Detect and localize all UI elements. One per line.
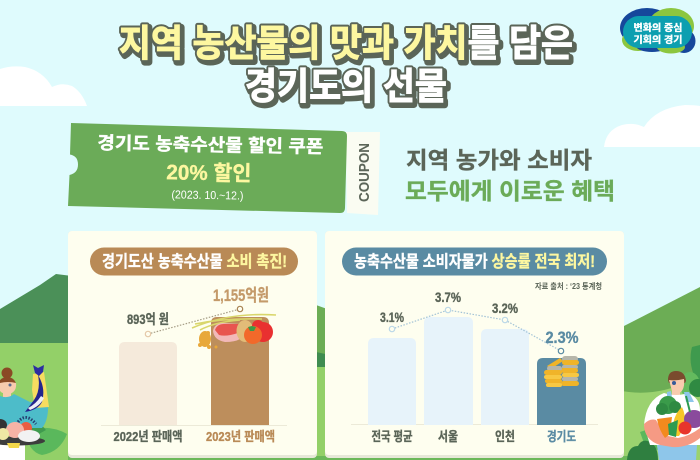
cloud right [604, 105, 700, 147]
panel: prices [325, 231, 624, 458]
bar average [368, 338, 416, 425]
prices heading pill: 농축수산물 소비자물가 상승률 전국 최저! [354, 252, 595, 271]
icon: farm produce [192, 315, 276, 349]
title: 지역 농산물의 맛과 가치를 담은 [119, 23, 573, 64]
coupon heading: 경기도 농축수산물 할인 쿠폰 [97, 133, 324, 157]
label 2022: 2022년 판매액 [114, 429, 182, 444]
source note: 자료 출처 : ‘23 통계청 [535, 281, 602, 291]
title [119, 23, 575, 110]
benefit text [405, 147, 615, 204]
sales bar chart [101, 286, 287, 444]
icon: woman with fish [0, 365, 67, 460]
value 2022: 893억 원 [127, 312, 169, 327]
icon: coins [544, 356, 579, 387]
cloud left [0, 66, 87, 106]
hills [0, 274, 700, 460]
label incheon: 인천 [495, 429, 515, 444]
trend line [392, 310, 561, 351]
title: 지역 농산물의 맛과 가치를 담은 [119, 23, 573, 64]
benefit text: 모두에게 이로운 혜택 [405, 178, 615, 204]
bar gyeonggi [537, 358, 586, 425]
panel: sales [68, 231, 317, 458]
sales heading pill [90, 248, 298, 276]
value 2023: 1,155억원 [213, 286, 269, 305]
price bar chart [351, 290, 598, 444]
coupon ticket [68, 123, 347, 213]
trend line [148, 309, 240, 334]
logo [620, 8, 696, 54]
value gyeonggi: 2.3% [546, 329, 579, 347]
icon: man with vegetables [627, 345, 700, 460]
prices heading pill [342, 248, 607, 276]
baseline [351, 424, 598, 425]
title: 경기도의 선물 [245, 66, 447, 107]
title: 경기도의 선물 [247, 68, 449, 110]
bar seoul [424, 317, 473, 425]
baseline [101, 425, 287, 426]
bar incheon [481, 329, 529, 425]
label average: 전국 평균 [372, 429, 413, 444]
bar 2023 [211, 317, 269, 425]
benefit text: 지역 농가와 소비자 [406, 147, 592, 173]
coupon dates: (2023. 10.~12.) [171, 189, 244, 203]
label gyeonggi: 경기도 [547, 429, 576, 444]
sales heading pill: 경기도산 농축수산물 소비 촉진! [102, 252, 287, 271]
coupon stub: COUPON [357, 143, 373, 202]
coupon stub [346, 132, 380, 215]
logo: 변화의 중심 [634, 22, 682, 34]
coupon [68, 123, 380, 215]
icon: seafood platter [0, 417, 45, 460]
title: 지역 농산물의 맛과 가치를 담은 [121, 26, 575, 66]
value average: 3.1% [380, 310, 404, 325]
value incheon: 3.2% [492, 301, 518, 316]
logo: 기회의 경기 [634, 34, 682, 46]
label seoul: 서울 [438, 429, 458, 444]
coupon discount: 20% 할인 [166, 161, 252, 186]
bar 2022 [119, 342, 177, 425]
value seoul: 3.7% [435, 290, 461, 305]
label 2023: 2023년 판매액 [206, 429, 275, 444]
title: 경기도의 선물 [245, 66, 447, 107]
